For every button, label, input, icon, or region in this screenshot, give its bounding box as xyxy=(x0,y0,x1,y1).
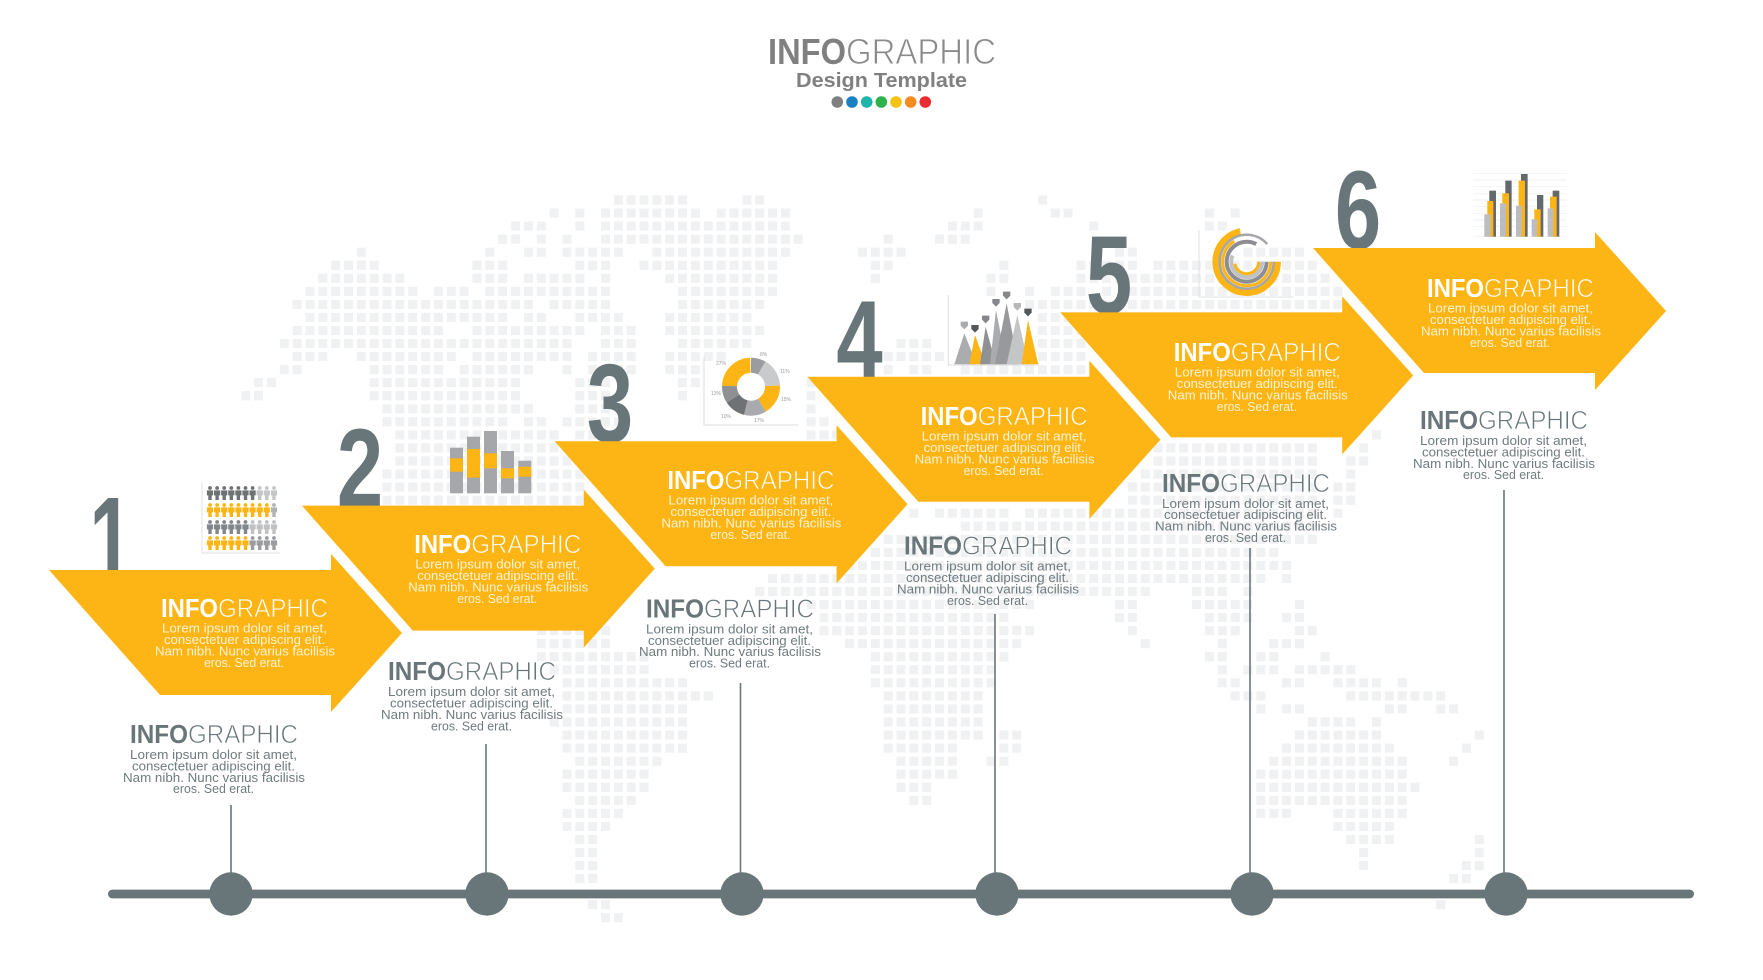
lower text 1 xyxy=(123,719,305,796)
lower text 3: INFO xyxy=(646,593,704,623)
arrow 1 xyxy=(49,554,402,712)
step 2 xyxy=(302,406,655,890)
lower text 6: consectetuer adipiscing elit. xyxy=(1422,445,1585,459)
lower text 6 xyxy=(1413,405,1595,482)
arrow text 4: consectetuer adipiscing elit. xyxy=(924,441,1085,455)
lower text 6: Nam nibh. Nunc varius facilisis xyxy=(1413,457,1595,471)
arrow text 5: Lorem ipsum dolor sit amet, xyxy=(1175,366,1340,380)
lower text 5: Lorem ipsum dolor sit amet, xyxy=(1162,497,1329,511)
arrow text 1: GRAPHIC xyxy=(218,593,328,623)
lower text 5: INFO xyxy=(1162,468,1220,498)
number 3: 3 xyxy=(587,341,633,466)
arrow text 6: Nam nibh. Nunc varius facilisis xyxy=(1421,324,1601,338)
icon: radial arc chart xyxy=(1199,230,1293,297)
arrow 4 xyxy=(807,361,1160,519)
arrow text 1 xyxy=(155,593,335,670)
stem 3 xyxy=(740,683,742,890)
icon: donut chart: 13% xyxy=(711,391,722,397)
number 4: 4 xyxy=(836,277,883,402)
icon: stacked bars xyxy=(450,431,531,493)
icon: donut chart: 27% xyxy=(716,361,727,367)
icon: donut chart xyxy=(704,352,798,425)
lower text 5: Nam nibh. Nunc varius facilisis xyxy=(1155,520,1337,534)
arrow text 2: consectetuer adipiscing elit. xyxy=(417,569,578,583)
arrow 2 xyxy=(302,490,655,648)
arrow text 6: GRAPHIC xyxy=(1484,273,1594,303)
icon: donut chart: 8% xyxy=(760,352,768,358)
arrow 6 xyxy=(1313,232,1666,390)
lower text 5 xyxy=(1155,468,1337,545)
lower text 4: Nam nibh. Nunc varius facilisis xyxy=(897,582,1079,596)
arrow text 4 xyxy=(915,401,1095,478)
arrow text 3: consectetuer adipiscing elit. xyxy=(670,505,831,519)
timeline xyxy=(108,872,1694,916)
lower text 5: consectetuer adipiscing elit. xyxy=(1164,508,1327,522)
arrow text 2: GRAPHIC xyxy=(471,529,581,559)
arrow text 3: eros. Sed erat. xyxy=(710,528,790,542)
arrow text 2: eros. Sed erat. xyxy=(457,592,537,606)
lower text 2: Lorem ipsum dolor sit amet, xyxy=(388,685,555,699)
arrow text 6: consectetuer adipiscing elit. xyxy=(1430,313,1591,327)
step 6 xyxy=(1313,148,1666,890)
lower text 2: INFO xyxy=(388,656,446,686)
lower text 3: Lorem ipsum dolor sit amet, xyxy=(646,622,813,636)
stem 1 xyxy=(230,805,232,890)
lower text 5: GRAPHIC xyxy=(1220,468,1330,498)
icon: people chart xyxy=(202,483,280,553)
world map dot pattern xyxy=(241,200,1488,918)
lower text 5: eros. Sed erat. xyxy=(1205,531,1286,545)
icon: grouped bar chart xyxy=(1473,173,1567,237)
icon: donut chart: 10% xyxy=(721,414,732,420)
title: INFOGRAPHIC xyxy=(768,31,996,72)
lower text 4: eros. Sed erat. xyxy=(947,594,1028,608)
arrow text 5 xyxy=(1168,337,1348,414)
subtitle: Design Template: Design Template xyxy=(796,70,967,92)
arrow text 4: INFO xyxy=(921,401,978,431)
arrow text 4: eros. Sed erat. xyxy=(964,464,1044,478)
arrow text 1: INFO xyxy=(161,593,218,623)
arrow text 5: INFO xyxy=(1174,337,1231,367)
arrow text 1: Lorem ipsum dolor sit amet, xyxy=(162,622,327,636)
lower text 2 xyxy=(381,656,563,733)
timeline bar xyxy=(108,890,1694,898)
lower text 4: consectetuer adipiscing elit. xyxy=(906,571,1069,585)
arrow 5 xyxy=(1060,296,1413,454)
stem 2 xyxy=(485,744,487,890)
title block xyxy=(768,31,996,108)
step 4 xyxy=(807,277,1160,890)
arrow text 5: consectetuer adipiscing elit. xyxy=(1177,377,1338,391)
lower text 3 xyxy=(639,593,821,671)
step 3 xyxy=(555,341,908,890)
lower text 1: Nam nibh. Nunc varius facilisis xyxy=(123,771,305,785)
step 1 xyxy=(49,472,402,890)
arrow text 5: GRAPHIC xyxy=(1231,337,1341,367)
lower text 6: Lorem ipsum dolor sit amet, xyxy=(1420,434,1587,448)
arrow text 6: Lorem ipsum dolor sit amet, xyxy=(1428,302,1593,316)
lower text 1: GRAPHIC xyxy=(188,719,298,749)
title: INFOGRAPHIC: INFO xyxy=(768,31,846,72)
lower text 3: GRAPHIC xyxy=(704,593,814,623)
arrow text 6: INFO xyxy=(1427,273,1484,303)
stem 5 xyxy=(1249,548,1251,890)
arrow text 3: INFO xyxy=(667,465,724,495)
arrow text 6 xyxy=(1421,273,1601,350)
lower text 1: consectetuer adipiscing elit. xyxy=(132,759,295,773)
arrow text 3: Lorem ipsum dolor sit amet, xyxy=(668,494,833,508)
arrow text 4: Lorem ipsum dolor sit amet, xyxy=(922,430,1087,444)
arrow text 2: Lorem ipsum dolor sit amet, xyxy=(415,558,580,572)
arrow text 3 xyxy=(661,465,841,542)
timeline nodes xyxy=(209,872,1528,916)
arrow text 1: eros. Sed erat. xyxy=(204,656,284,670)
title: INFOGRAPHIC: GRAPHIC xyxy=(846,31,996,72)
arrow text 5: eros. Sed erat. xyxy=(1217,400,1297,414)
lower text 6: GRAPHIC xyxy=(1478,405,1588,435)
stem 6 xyxy=(1503,490,1505,890)
arrow text 6: eros. Sed erat. xyxy=(1470,336,1550,350)
lower text 6: INFO xyxy=(1420,405,1478,435)
icon: donut chart: 11% xyxy=(780,369,790,375)
lower text 1: INFO xyxy=(130,719,188,749)
lower text 2: GRAPHIC xyxy=(446,656,556,686)
lower text 4: INFO xyxy=(904,531,962,561)
icon: donut chart: 17% xyxy=(754,418,765,424)
icon: donut chart: 15% xyxy=(781,397,792,403)
arrow text 2 xyxy=(408,529,588,606)
lower text 6: eros. Sed erat. xyxy=(1463,468,1544,482)
arrow text 3: GRAPHIC xyxy=(724,465,834,495)
lower text 1: eros. Sed erat. xyxy=(173,782,254,796)
lower text 1: Lorem ipsum dolor sit amet, xyxy=(130,748,297,762)
number 5: 5 xyxy=(1086,213,1132,337)
lower text 2: eros. Sed erat. xyxy=(431,719,512,733)
arrow text 4: Nam nibh. Nunc varius facilisis xyxy=(915,452,1095,466)
lower text 2: consectetuer adipiscing elit. xyxy=(390,697,553,711)
step 5 xyxy=(1060,213,1413,890)
lower text 4: Lorem ipsum dolor sit amet, xyxy=(904,560,1071,574)
arrow text 3: Nam nibh. Nunc varius facilisis xyxy=(661,516,841,530)
number 1: 1 xyxy=(89,472,133,609)
lower text 3: consectetuer adipiscing elit. xyxy=(648,634,811,648)
lower text 3: Nam nibh. Nunc varius facilisis xyxy=(639,645,821,659)
number 6: 6 xyxy=(1335,148,1381,272)
arrow text 2: INFO xyxy=(414,529,471,559)
number 2: 2 xyxy=(337,406,383,530)
lower text 4: GRAPHIC xyxy=(962,531,1072,561)
arrow text 4: GRAPHIC xyxy=(978,401,1088,431)
arrow text 2: Nam nibh. Nunc varius facilisis xyxy=(408,580,588,594)
colour dots xyxy=(832,96,931,108)
arrow text 1: Nam nibh. Nunc varius facilisis xyxy=(155,644,335,658)
arrow text 5: Nam nibh. Nunc varius facilisis xyxy=(1168,388,1348,402)
lower text 3: eros. Sed erat. xyxy=(689,657,770,671)
lower text 4 xyxy=(897,531,1079,608)
icon: peak chart xyxy=(948,292,1038,365)
arrow 3 xyxy=(555,425,908,583)
arrow text 1: consectetuer adipiscing elit. xyxy=(164,633,325,647)
lower text 2: Nam nibh. Nunc varius facilisis xyxy=(381,708,563,722)
stem 4 xyxy=(994,614,996,890)
